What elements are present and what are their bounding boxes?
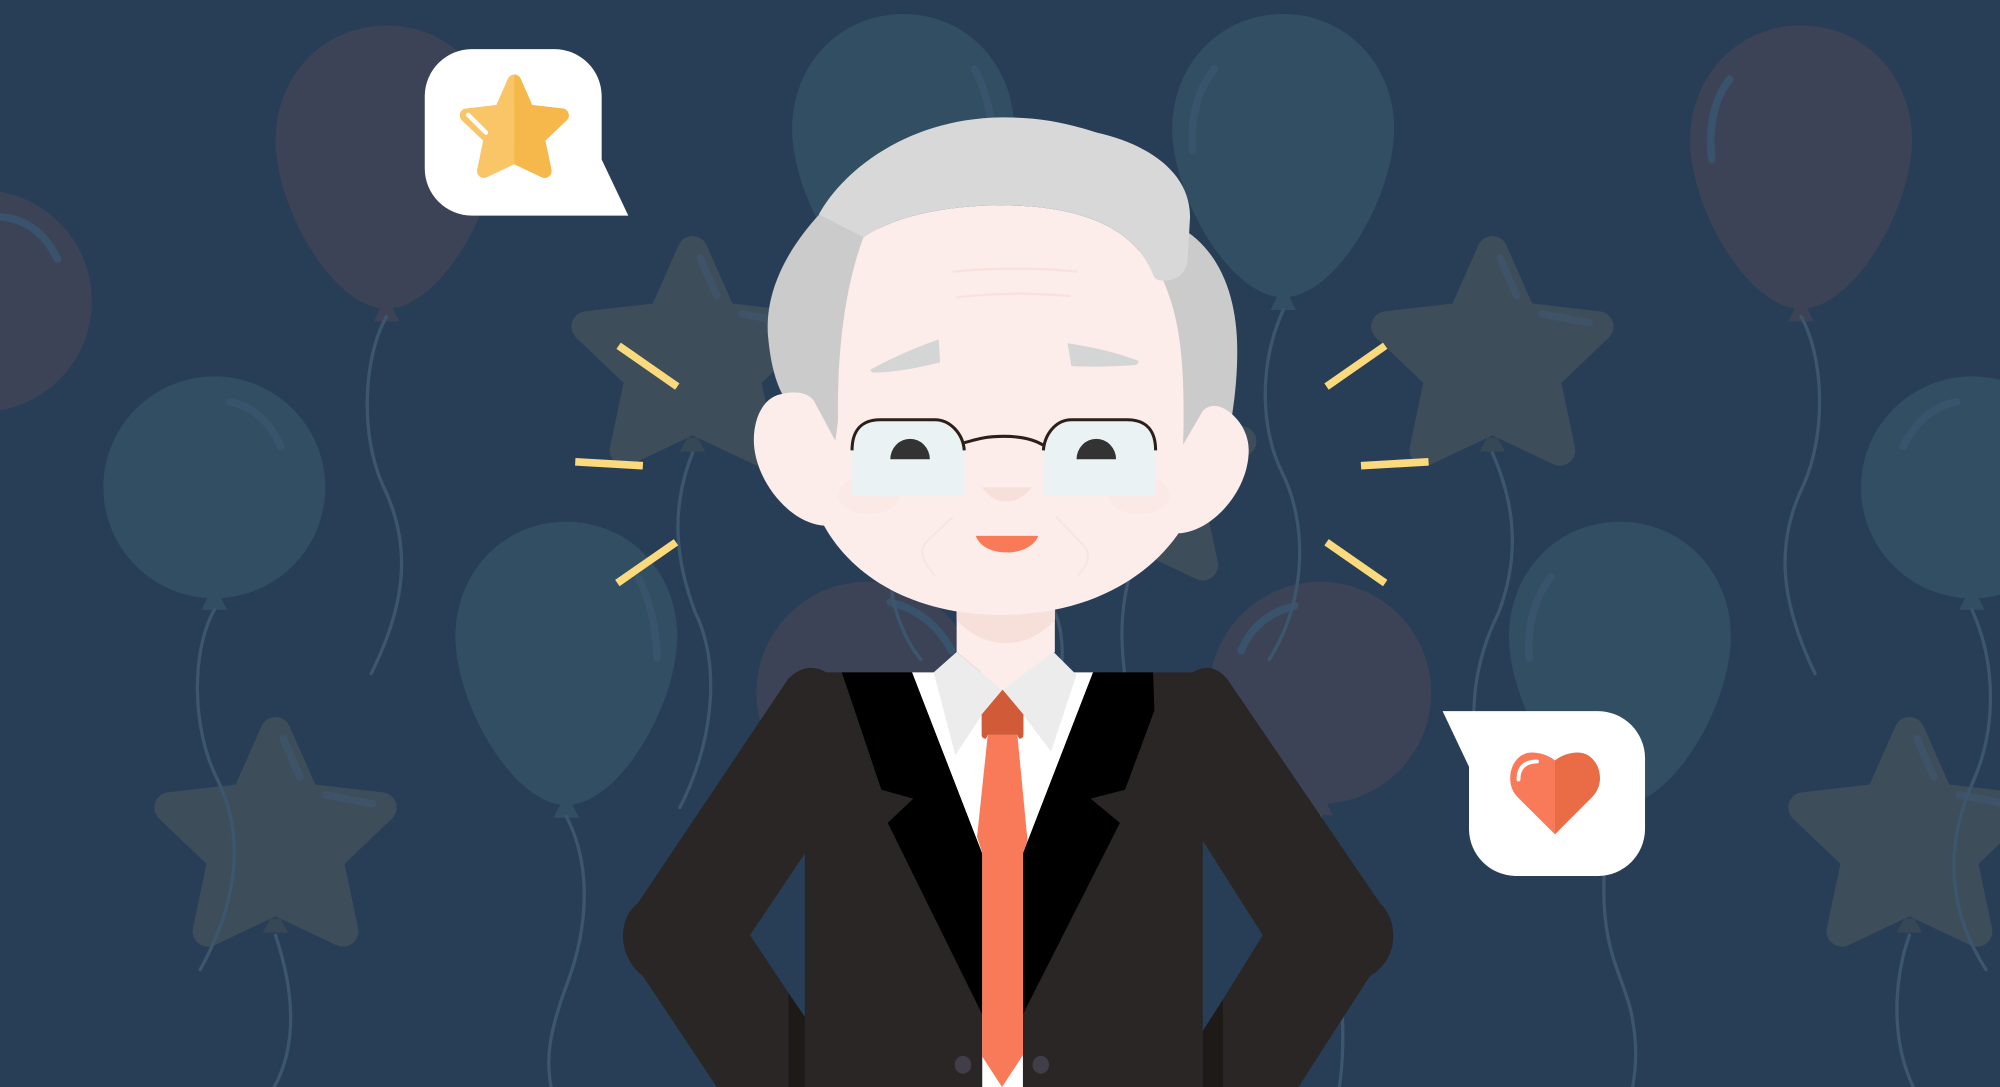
speech bubble: star [425,49,628,216]
glasses frame [852,420,1156,450]
balloon: plum tall right [1690,26,1912,674]
balloon: plum tall left [276,26,497,674]
glasses [852,420,1156,496]
top hair [819,117,1190,281]
sparkle rays left [575,346,677,583]
speech bubble: heart [1443,711,1645,876]
nose [982,487,1032,501]
jacket body [805,672,1203,1087]
neck [957,600,1055,690]
jacket buttons [955,1056,1049,1074]
icon: heart [1510,752,1600,834]
character: man in suit [623,117,1393,1087]
icon: gold star [467,81,562,171]
left arm [623,668,827,1087]
cheeks [838,476,1170,514]
balloon: star lower left [170,732,381,1087]
balloon: plum round right centre [1209,582,1431,1087]
balloon: star upper right [1386,251,1598,765]
ears [754,392,1249,533]
right arm [1193,668,1393,1087]
balloon: blue tall centre [792,14,1014,660]
string fragment by neck [1054,610,1062,670]
shirt [912,672,1093,1087]
balloon: star lower right [1804,732,2000,1087]
smile lines [922,517,1088,575]
balloon: plum partial far left [0,190,92,412]
balloon: blue round left [103,376,325,970]
balloon: blue round far right [1861,376,2000,970]
balloon: plum round centre [756,582,978,815]
balloon: blue tall lower left [455,522,677,1087]
eyes [890,439,1116,459]
right lapel [1023,672,1154,1014]
mouth [976,536,1038,552]
balloon: blue tall lower right [1509,522,1731,1087]
forehead wrinkles [953,269,1078,297]
collar [934,652,1077,755]
balloon: star behind head [1029,366,1241,676]
balloon: star upper left [587,251,798,808]
tie [977,690,1028,1087]
sparkle rays right [1327,346,1429,583]
left lapel [842,672,982,1014]
back hair [768,204,1237,457]
eyebrows [870,339,1139,373]
balloon: blue tall right of head [1172,14,1394,660]
face [824,205,1184,615]
